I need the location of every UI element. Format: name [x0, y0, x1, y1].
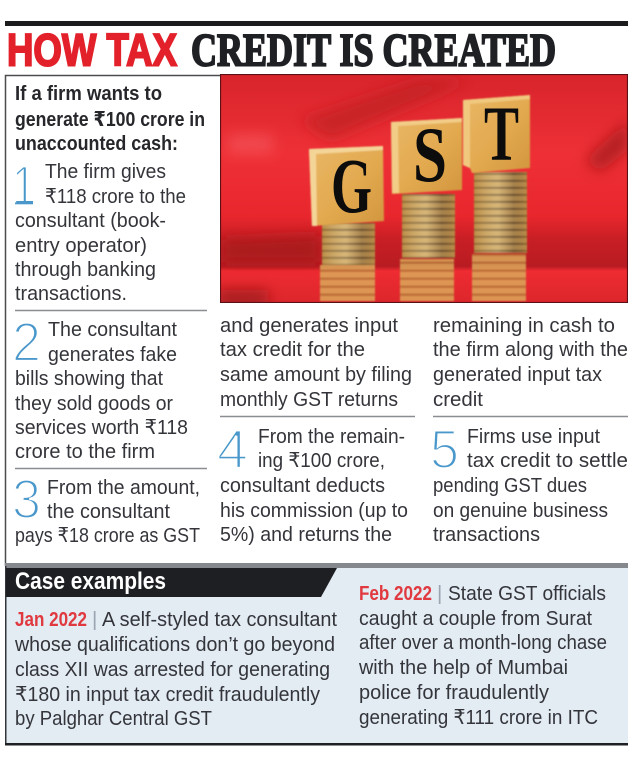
- step 1: [12, 154, 36, 216]
- case: January 2022: whose qualifications don’t go beyond: [14, 633, 335, 656]
- panel: case examples: [5, 563, 628, 746]
- step 2 text: [15, 318, 188, 463]
- step 3 continued, middle column: tax credit for the: [220, 338, 365, 361]
- coin stacks: [320, 172, 527, 301]
- case: February 2022: caught a couple from Surat: [359, 607, 592, 630]
- top rule: [5, 21, 628, 26]
- title: HOW TAX: [7, 24, 177, 76]
- photo: GST wooden blocks on coin stacks: [218, 74, 628, 306]
- case: January 2022: A self-styled tax consultant: [102, 608, 337, 631]
- case examples heading: [6, 568, 337, 597]
- block letters: [334, 108, 518, 213]
- intro text: unaccounted cash:: [15, 132, 178, 155]
- step 2 text: services worth ₹118: [15, 416, 188, 439]
- number 1: 1: [12, 154, 36, 216]
- case: January 2022: [14, 608, 337, 730]
- intro text: generate ₹100 crore in: [15, 108, 205, 131]
- block letters: G: [331, 142, 372, 229]
- panel: steps frame: [6, 76, 220, 566]
- step 5 text: [433, 425, 628, 546]
- step 1 text: entry operator): [15, 234, 147, 257]
- case: January 2022: class XII was arrested for generating: [15, 658, 330, 681]
- step 4 continued, right column: credit: [433, 388, 483, 411]
- step 1 text: through banking: [15, 258, 156, 281]
- case: February 2022: Feb 2022: [359, 582, 432, 605]
- step 4 text: From the remain-: [258, 425, 405, 448]
- step 1 text: ₹118 crore to the: [45, 185, 186, 208]
- case: February 2022: with the help of Mumbai: [358, 656, 568, 679]
- case: February 2022: police for fraudulently: [359, 681, 550, 704]
- step 4 text: [220, 425, 408, 546]
- step 4 text: consultant deducts: [220, 474, 385, 497]
- number 3: 3: [12, 468, 41, 530]
- case examples heading: Case examples: [15, 568, 166, 595]
- step 5 text: pending GST dues: [433, 474, 587, 497]
- case: January 2022: |: [92, 608, 97, 631]
- step 3 text: pays ₹18 crore as GST: [15, 524, 200, 547]
- step 4 continued, right column: generated input tax: [433, 363, 603, 386]
- step 3 continued, middle column: same amount by filing: [220, 363, 412, 386]
- step 2 text: The consultant: [48, 318, 177, 341]
- step 4 text: 5%) and returns the: [220, 523, 392, 546]
- case: January 2022: by Palghar Central GST: [15, 707, 212, 730]
- intro text: [15, 82, 205, 155]
- step 2 text: they sold goods or: [15, 392, 173, 415]
- block letters: T: [484, 90, 519, 177]
- step 2 text: generates fake: [48, 343, 177, 366]
- wooden blocks: [309, 95, 530, 226]
- step 5 text: on genuine business: [433, 499, 608, 522]
- step 3 text: [15, 476, 200, 547]
- block letters: S: [413, 111, 447, 198]
- case: February 2022: |: [437, 582, 442, 605]
- case: February 2022: State GST officials: [448, 582, 606, 605]
- title: [7, 24, 556, 76]
- step 5 text: transactions: [433, 523, 540, 546]
- step 4 text: ing ₹100 crore,: [258, 449, 385, 472]
- case: January 2022: ₹180 in input tax credit fraudulently: [15, 683, 321, 706]
- step 4 continued, right column: the firm along with the: [433, 338, 628, 361]
- step 3 continued, middle column: and generates input: [220, 314, 398, 337]
- case: February 2022: [358, 582, 607, 729]
- step 3 continued, middle column: [220, 314, 412, 411]
- step 5 text: Firms use input: [467, 425, 600, 448]
- case: February 2022: after over a month-long chase: [359, 631, 607, 654]
- intro text: If a firm wants to: [15, 82, 162, 105]
- step 1 text: [15, 160, 186, 305]
- number 5: 5: [430, 418, 459, 480]
- case: January 2022: Jan 2022: [15, 608, 87, 631]
- step 3 text: the consultant: [47, 500, 170, 523]
- step 4 continued, right column: remaining in cash to: [433, 314, 615, 337]
- step 1 text: transactions.: [15, 282, 127, 305]
- step 4 continued, right column: [433, 314, 628, 411]
- step 2 text: bills showing that: [15, 367, 163, 390]
- step 1 text: consultant (book-: [15, 209, 166, 232]
- case: February 2022: generating ₹111 crore in ITC: [359, 706, 598, 729]
- step 4 text: his commission (up to: [220, 499, 408, 522]
- number 4: 4: [217, 418, 248, 480]
- step 2 text: crore to the firm: [15, 440, 155, 463]
- step 3 text: From the amount,: [47, 476, 200, 499]
- step 1 text: The firm gives: [45, 160, 166, 183]
- step 5 text: tax credit to settle: [467, 449, 628, 472]
- step 3 continued, middle column: monthly GST returns: [220, 388, 398, 411]
- number 2: 2: [12, 311, 41, 373]
